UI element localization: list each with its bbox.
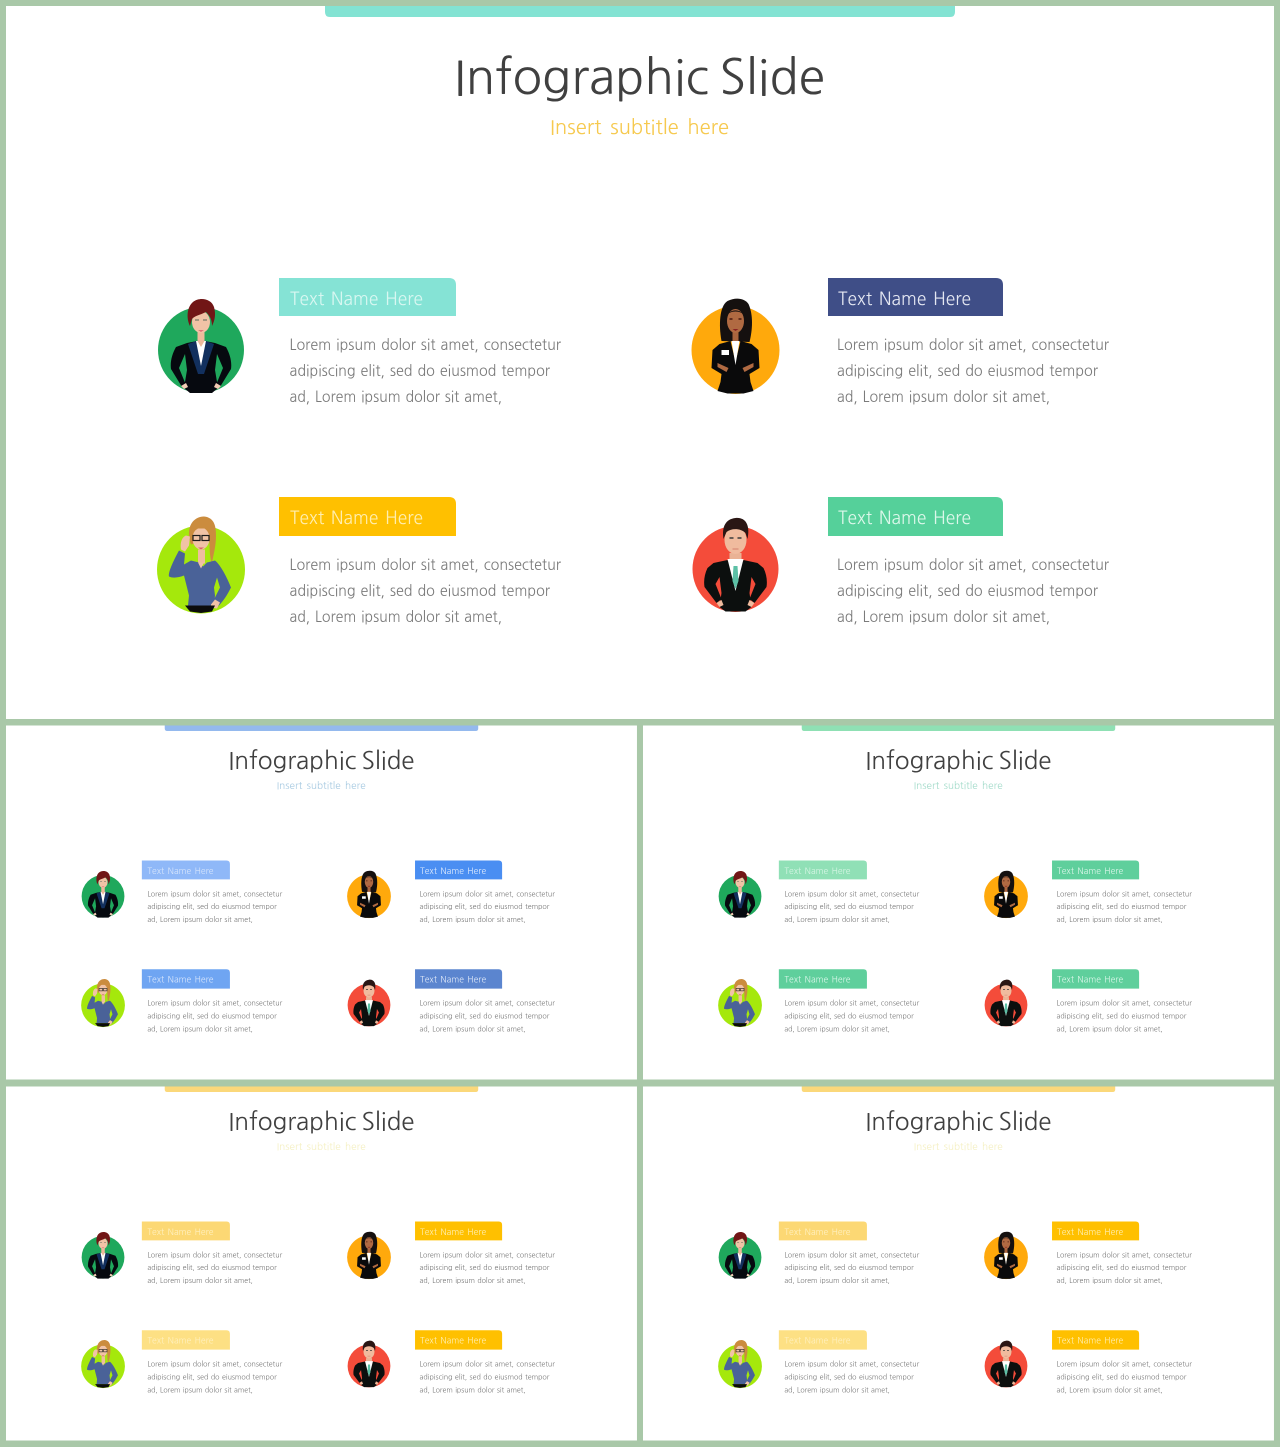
panel: blue slide [6,726,637,1080]
body text 2: ad, Lorem ipsum dolor sit amet, [1057,916,1162,924]
label tag 2 [1052,1222,1139,1240]
body text 3: ad, Lorem ipsum dolor sit amet, [290,610,502,625]
body text 4: ad, Lorem ipsum dolor sit amet, [420,1025,525,1033]
label tag 3 [779,969,867,989]
body text 4: ad, Lorem ipsum dolor sit amet, [1057,1386,1162,1394]
top accent bar [165,726,478,731]
body text 4: adipiscing elit, sed do eiusmod tempor [420,1373,550,1381]
title: Infographic Slide [454,53,825,101]
label tag 1 [142,861,230,879]
body text 1: Lorem ipsum dolor sit amet, consectetur [290,338,562,353]
panel: main slide [6,6,1274,719]
avatar: woman green [719,871,761,918]
body text 3: ad, Lorem ipsum dolor sit amet, [784,1025,890,1033]
body text 3: Lorem ipsum dolor sit amet, consectetur [147,1361,282,1369]
body text 4: Lorem ipsum dolor sit amet, consectetur [1057,1361,1192,1369]
subtitle: Insert subtitle here [914,1141,1003,1152]
avatar: man red [348,1341,390,1387]
body text 4: adipiscing elit, sed do eiusmod tempor [1057,1373,1187,1381]
body text 1 [147,890,282,924]
tag text 3: Text Name Here [290,509,423,527]
body text 4 [1057,1361,1192,1394]
body text 1: Lorem ipsum dolor sit amet, consectetur [784,890,919,898]
label tag 4 [415,969,502,989]
label tag 1 [779,861,867,879]
body text 2: ad, Lorem ipsum dolor sit amet, [420,916,525,924]
tag text 4: Text Name Here [838,509,971,527]
body text 1: ad, Lorem ipsum dolor sit amet, [147,916,253,924]
body text 4: adipiscing elit, sed do eiusmod tempor [420,1012,550,1020]
body text 2: adipiscing elit, sed do eiusmod tempor [1057,1264,1187,1272]
avatar: woman orange [347,871,391,918]
label tag 1 [779,1222,867,1240]
label tag 1 [142,1222,230,1240]
body text 1: adipiscing elit, sed do eiusmod tempor [290,364,551,379]
body text 1: adipiscing elit, sed do eiusmod tempor [147,1264,277,1272]
body text 4: ad, Lorem ipsum dolor sit amet, [420,1386,525,1394]
body text 3: adipiscing elit, sed do eiusmod tempor [290,584,551,599]
tag text 2: Text Name Here [1057,867,1123,876]
tag text 4: Text Name Here [1057,976,1123,985]
avatar: woman lime [81,979,125,1027]
label tag 3 [279,497,456,536]
body text 1: ad, Lorem ipsum dolor sit amet, [784,1277,890,1285]
body text 2 [420,890,555,924]
body text 2 [837,338,1110,405]
tag text 1: Text Name Here [784,1228,851,1237]
body text 3 [147,1000,282,1033]
body text 4 [420,1000,555,1033]
body text 4: ad, Lorem ipsum dolor sit amet, [837,610,1050,625]
body text 1 [147,1251,282,1285]
body text 2 [420,1251,555,1285]
tag text 3: Text Name Here [147,1337,214,1346]
avatar: man red [692,518,778,612]
body text 2 [1057,1251,1192,1285]
avatar: woman lime [718,979,762,1027]
tag text 3: Text Name Here [147,976,214,985]
body text 4: Lorem ipsum dolor sit amet, consectetur [837,558,1110,573]
body text 3: Lorem ipsum dolor sit amet, consectetur [784,1000,919,1008]
body text 3: Lorem ipsum dolor sit amet, consectetur [147,1000,282,1008]
body text 3: Lorem ipsum dolor sit amet, consectetur [784,1361,919,1369]
body text 3 [784,1000,919,1033]
body text 3: adipiscing elit, sed do eiusmod tempor [784,1373,914,1381]
tag text 2: Text Name Here [838,290,971,308]
body text 3: ad, Lorem ipsum dolor sit amet, [147,1386,253,1394]
body text 2: Lorem ipsum dolor sit amet, consectetur [837,338,1110,353]
avatar: woman green [82,1232,124,1279]
avatar: man red [348,980,390,1026]
body text 1 [290,338,562,405]
tag text 3: Text Name Here [784,976,851,985]
body text 4: ad, Lorem ipsum dolor sit amet, [1057,1025,1162,1033]
body text 2: ad, Lorem ipsum dolor sit amet, [420,1277,525,1285]
top accent bar [325,6,955,17]
label tag 2 [828,278,1003,316]
label tag 4 [1052,1330,1139,1350]
tag text 1: Text Name Here [784,867,851,876]
body text 4: adipiscing elit, sed do eiusmod tempor [837,584,1099,599]
tag text 4: Text Name Here [1057,1337,1123,1346]
body text 3 [290,558,562,625]
tag text 4: Text Name Here [420,976,486,985]
label tag 3 [142,1330,230,1350]
avatar: man red [985,1341,1027,1387]
body text 3: adipiscing elit, sed do eiusmod tempor [147,1012,277,1020]
body text 2: Lorem ipsum dolor sit amet, consectetur [420,890,555,898]
body text 1: ad, Lorem ipsum dolor sit amet, [290,390,502,405]
avatar: man red [985,980,1027,1026]
body text 1 [784,1251,919,1285]
tag text 2: Text Name Here [420,1228,486,1237]
title: Infographic Slide [228,750,415,773]
avatar: woman green [158,299,244,393]
avatar: woman orange [984,1232,1028,1279]
body text 1: Lorem ipsum dolor sit amet, consectetur [147,890,282,898]
title: Infographic Slide [865,1111,1052,1134]
subtitle: Insert subtitle here [277,780,366,791]
body text 3 [147,1361,282,1394]
body text 4 [420,1361,555,1394]
top accent bar [165,1086,478,1092]
body text 3: Lorem ipsum dolor sit amet, consectetur [290,558,562,573]
body text 2: adipiscing elit, sed do eiusmod tempor [1057,903,1187,911]
body text 2: ad, Lorem ipsum dolor sit amet, [1057,1277,1162,1285]
panel: yellow slide right [643,1086,1274,1441]
avatar: woman green [719,1232,761,1279]
body text 4: adipiscing elit, sed do eiusmod tempor [1057,1012,1187,1020]
top accent bar [802,1086,1115,1092]
body text 3: ad, Lorem ipsum dolor sit amet, [147,1025,253,1033]
label tag 4 [1052,969,1139,989]
subtitle: Insert subtitle here [277,1141,366,1152]
body text 1: ad, Lorem ipsum dolor sit amet, [784,916,890,924]
tag text 1: Text Name Here [147,867,214,876]
body text 3: ad, Lorem ipsum dolor sit amet, [784,1386,890,1394]
body text 4: Lorem ipsum dolor sit amet, consectetur [420,1361,555,1369]
body text 2: adipiscing elit, sed do eiusmod tempor [837,364,1099,379]
body text 1: adipiscing elit, sed do eiusmod tempor [147,903,277,911]
avatar: woman orange [347,1232,391,1279]
body text 3: adipiscing elit, sed do eiusmod tempor [784,1012,914,1020]
label tag 1 [279,278,456,316]
tag text 4: Text Name Here [420,1337,486,1346]
panel: green slide [643,726,1274,1080]
body text 4: Lorem ipsum dolor sit amet, consectetur [420,1000,555,1008]
body text 3: adipiscing elit, sed do eiusmod tempor [147,1373,277,1381]
avatar: woman orange [692,299,780,394]
subtitle: Insert subtitle here [550,117,729,137]
tag text 1: Text Name Here [147,1228,214,1237]
body text 1: ad, Lorem ipsum dolor sit amet, [147,1277,253,1285]
body text 2 [1057,890,1192,924]
label tag 2 [415,1222,502,1240]
label tag 2 [415,861,502,879]
body text 2: ad, Lorem ipsum dolor sit amet, [837,390,1050,405]
avatar: woman orange [984,871,1028,918]
body text 2: adipiscing elit, sed do eiusmod tempor [420,1264,550,1272]
body text 1: adipiscing elit, sed do eiusmod tempor [784,1264,914,1272]
label tag 3 [142,969,230,989]
body text 2: Lorem ipsum dolor sit amet, consectetur [1057,890,1192,898]
body text 2: adipiscing elit, sed do eiusmod tempor [420,903,550,911]
avatar: woman lime [157,516,245,614]
body text 4 [837,558,1110,625]
body text 1: adipiscing elit, sed do eiusmod tempor [784,903,914,911]
tag text 2: Text Name Here [420,867,486,876]
panel: yellow slide left [6,1086,637,1441]
label tag 2 [1052,861,1139,879]
tag text 1: Text Name Here [290,290,423,308]
label tag 3 [779,1330,867,1350]
avatar: woman green [82,871,124,918]
tag text 3: Text Name Here [784,1337,851,1346]
body text 1: Lorem ipsum dolor sit amet, consectetur [147,1251,282,1259]
label tag 4 [415,1330,502,1350]
body text 2: Lorem ipsum dolor sit amet, consectetur [420,1251,555,1259]
subtitle: Insert subtitle here [914,780,1003,791]
top accent bar [802,726,1115,731]
body text 1 [784,890,919,924]
body text 2: Lorem ipsum dolor sit amet, consectetur [1057,1251,1192,1259]
body text 4: Lorem ipsum dolor sit amet, consectetur [1057,1000,1192,1008]
body text 3 [784,1361,919,1394]
label tag 4 [828,497,1003,536]
title: Infographic Slide [865,750,1052,773]
title: Infographic Slide [228,1111,415,1134]
avatar: woman lime [81,1340,125,1388]
body text 1: Lorem ipsum dolor sit amet, consectetur [784,1251,919,1259]
body text 4 [1057,1000,1192,1033]
tag text 2: Text Name Here [1057,1228,1123,1237]
avatar: woman lime [718,1340,762,1388]
